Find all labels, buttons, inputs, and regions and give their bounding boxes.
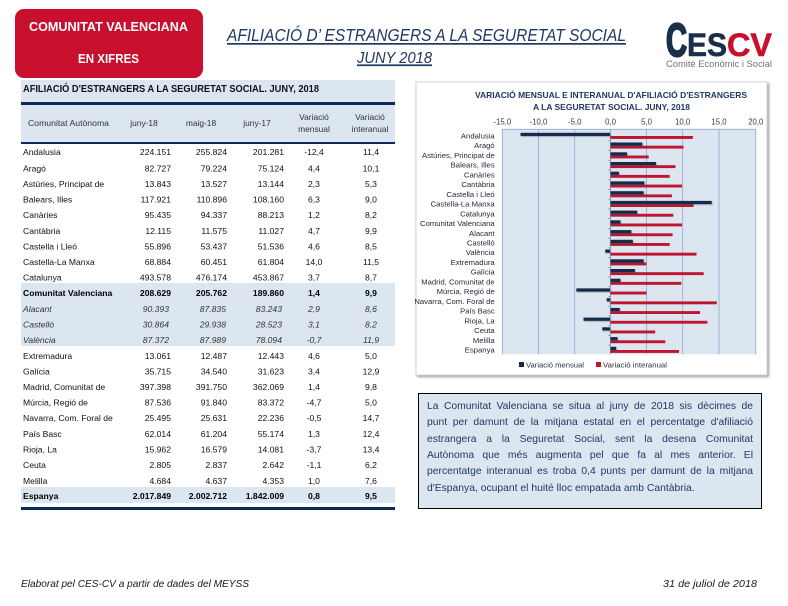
row: Múrcia: 5,0 — [365, 398, 377, 408]
row: Aragó — [23, 164, 380, 174]
table: afiliació per comunitat — [21, 80, 395, 510]
row: Madrid: 397.398 — [140, 382, 171, 392]
row: Aragó: 4,4 — [308, 164, 320, 174]
category labels — [414, 131, 496, 354]
panel: bar chart — [414, 82, 767, 375]
row: Madrid: 9,8 — [365, 382, 377, 392]
row: Catalunya: 453.867 — [253, 272, 284, 282]
row: Navarra: 25.631 — [201, 413, 227, 423]
title: AFILIACIÓ D’ ESTRANGERS A LA SEGURETAT SOCIAL — [226, 24, 626, 45]
row: Castella i Lleó: 8,5 — [365, 242, 377, 252]
table header: Variació — [355, 112, 385, 122]
row: Melilla: 1,0 — [308, 476, 320, 486]
row: Comunitat Valenciana: 208.629 — [140, 288, 171, 298]
row: Espanya: 2.017.849 — [133, 491, 171, 501]
row: València: València — [23, 335, 56, 345]
row: Galícia — [23, 366, 380, 376]
title — [226, 24, 626, 67]
category labels: Navarra, Com. Foral de — [414, 297, 495, 306]
row: Canàries: 1,2 — [308, 210, 320, 220]
row: Madrid: 391.750 — [196, 382, 227, 392]
row: Cantàbria: 4,7 — [308, 226, 320, 236]
row: Madrid — [23, 382, 377, 392]
chart title: VARIACIÓ MENSUAL E INTERANUAL D'AFILIACIÓ D'ESTRANGERS — [475, 89, 748, 100]
row: Astúries — [23, 179, 377, 189]
title: JUNY 2018 — [356, 50, 432, 67]
category labels: Astúries, Principat de — [422, 151, 495, 160]
row: Castella-La Manxa: 68.884 — [145, 257, 171, 267]
row: Comunitat Valenciana: 1,4 — [308, 288, 320, 298]
row: Catalunya: 3,7 — [308, 272, 320, 282]
legend: Variació mensual — [526, 360, 584, 370]
row: Rioja: Rioja, La — [23, 444, 57, 454]
row: Castella i Lleó: 4,6 — [308, 242, 320, 252]
row: Ceuta: 2.805 — [149, 460, 171, 470]
row: Astúries: 13.144 — [258, 179, 284, 189]
row: Canàries: 94.337 — [201, 210, 227, 220]
row: Extremadura — [23, 351, 377, 361]
legend: Variació interanual — [603, 360, 667, 370]
category labels: Castelló — [467, 238, 495, 248]
table header: mensual — [298, 124, 330, 134]
category labels: Alacant — [469, 229, 496, 238]
row: Andalusia: 224.151 — [140, 147, 171, 157]
series: variació mensual — [520, 133, 712, 350]
row: País Basc: 55.174 — [258, 429, 284, 439]
row: Astúries: 13.843 — [145, 179, 171, 189]
row: València: -0,7 — [307, 335, 323, 345]
row: Comunitat Valenciana: 189.860 — [253, 288, 284, 298]
row: Andalusia — [23, 147, 379, 157]
category labels: País Basc — [460, 307, 495, 316]
badge: Comunitat Valenciana en xifres: EN XIFRES — [78, 52, 139, 66]
row: Castella-La Manxa: 11,5 — [363, 257, 379, 267]
row: Rioja: -3,7 — [307, 444, 322, 454]
category labels: Andalusia — [461, 131, 495, 140]
row: Andalusia: 255.824 — [196, 147, 227, 157]
footer: source: Elaborat pel CES-CV a partir de dades del MEYSS — [21, 578, 249, 590]
axis labels: 10,0 — [675, 118, 691, 126]
row: Castelló: 8,2 — [365, 320, 377, 330]
row: Balears: Balears, Illes — [23, 194, 72, 204]
row: Castella-La Manxa: 14,0 — [306, 257, 323, 267]
axis labels — [493, 118, 764, 126]
row: Navarra — [23, 413, 380, 423]
row: Castelló: 30.864 — [143, 320, 169, 330]
chart title — [475, 89, 748, 112]
row: Múrcia: Múrcia, Regió de — [23, 398, 88, 408]
row: Andalusia: 201.281 — [253, 147, 284, 157]
row: Espanya — [23, 491, 377, 501]
row: Cantàbria: 9,9 — [365, 226, 377, 236]
row: Castella-La Manxa — [23, 257, 379, 267]
row: Comunitat Valenciana: 9,9 — [365, 288, 377, 298]
row: Ceuta: 2.642 — [262, 460, 284, 470]
row: Espanya: Espanya — [23, 491, 59, 501]
row: Cantàbria: Cantàbria — [23, 226, 60, 236]
row: Balears: 117.921 — [141, 194, 171, 204]
badge: Comunitat Valenciana en xifres — [15, 9, 203, 78]
table header: juny-17 — [242, 118, 271, 128]
axis labels: 5,0 — [641, 118, 653, 126]
category labels: Comunitat Valenciana — [420, 219, 495, 228]
row: País Basc — [23, 429, 380, 439]
logo: CES-CV: CV — [727, 27, 773, 63]
row: Ceuta — [23, 460, 377, 470]
row: Ceuta: 6,2 — [365, 460, 377, 470]
row: Astúries: 13.527 — [201, 179, 227, 189]
chart title: A LA SEGURETAT SOCIAL. JUNY, 2018 — [533, 103, 690, 112]
row: País Basc: 62.014 — [145, 429, 171, 439]
row: Astúries: Astúries, Principat de — [23, 179, 104, 189]
badge: Comunitat Valenciana en xifres: COMUNITAT VALENCIANA — [29, 20, 188, 34]
category labels: Balears, Illes — [451, 161, 495, 170]
row: Alacant: 83.243 — [256, 304, 282, 314]
table header: Comunitat Autònoma — [28, 118, 109, 128]
category labels: Madrid, Comunitat de — [421, 277, 495, 286]
row: País Basc: 61.204 — [201, 429, 227, 439]
category labels: Ceuta — [474, 326, 495, 335]
row: Castella-La Manxa: 61.804 — [258, 257, 284, 267]
category labels: Galícia — [471, 268, 495, 277]
row: Extremadura: 12.487 — [201, 351, 227, 361]
row: Canàries: 88.213 — [258, 210, 284, 220]
category labels: València — [466, 248, 495, 257]
table title: AFILIACIÓ D'ESTRANGERS A LA SEGURETAT SOCIAL. JUNY, 2018 — [23, 82, 319, 95]
row: Astúries: 2,3 — [308, 179, 320, 189]
row: Andalusia: Andalusia — [23, 147, 61, 157]
row: Alacant: 2,9 — [307, 304, 320, 314]
row: Canàries: 95.435 — [145, 210, 171, 220]
row: Ceuta: 2.837 — [205, 460, 227, 470]
row: Castelló: 29.938 — [199, 320, 226, 330]
row: Extremadura: 5,0 — [365, 351, 377, 361]
row: Alacant — [22, 304, 377, 314]
table header: interanual — [352, 124, 389, 134]
row: Aragó: Aragó — [23, 164, 46, 174]
category labels: Espanya — [465, 346, 495, 354]
category labels: Castella i Lleó — [446, 190, 495, 199]
row: Canàries: 8,2 — [365, 210, 377, 220]
footer: date: 31 de juliol de 2018 — [663, 578, 757, 590]
logo: CES-CV — [666, 14, 773, 69]
row: Madrid: 362.069 — [253, 382, 284, 392]
axis labels: 20,0 — [748, 118, 764, 126]
row: Navarra: Navarra, Com. Foral de — [23, 413, 113, 423]
row: Comunitat Valenciana: 205.762 — [196, 288, 227, 298]
row: Galícia: 34.540 — [201, 366, 227, 376]
row: Múrcia — [23, 398, 377, 408]
category labels: Catalunya — [460, 209, 495, 218]
row: Comunitat Valenciana: Comunitat Valenciana — [23, 288, 113, 298]
row: València: 87.989 — [200, 335, 226, 345]
axis labels: -10,0 — [530, 118, 548, 126]
axis labels: -15,0 — [493, 118, 512, 126]
callout: commentary text: La Comunitat Valenciana se situa al juny de 2018 sis dècimes de — [427, 401, 753, 412]
row: Aragó: 82.727 — [145, 164, 171, 174]
row: Balears: 9,0 — [365, 194, 377, 204]
axis labels: 0,0 — [605, 118, 617, 126]
row: Extremadura: 4,6 — [308, 351, 320, 361]
row: Rioja: 14.081 — [258, 444, 284, 454]
row: Alacant: Alacant — [22, 304, 52, 314]
row: Múrcia: 91.840 — [201, 398, 227, 408]
row: Aragó: 79.224 — [201, 164, 227, 174]
row: Canàries: Canàries — [23, 210, 57, 220]
row: Catalunya: 493.578 — [140, 272, 171, 282]
row: Rioja — [23, 444, 380, 454]
row: Cantàbria: 11.575 — [201, 226, 227, 236]
category labels: Melilla — [473, 336, 495, 345]
category labels: Múrcia, Regió de — [437, 287, 495, 296]
row: Cantàbria: 11.027 — [258, 226, 284, 236]
row: Melilla: 4.353 — [262, 476, 284, 486]
row: Espanya: 9,5 — [365, 491, 377, 501]
row: València — [23, 335, 379, 345]
row: Ceuta: -1,1 — [307, 460, 322, 470]
axis labels: -5,0 — [568, 118, 582, 126]
callout: commentary text: estrangera a la Seguretat Social, sent la desena Comunitat — [427, 434, 753, 445]
row: Castella i Lleó: Castella i Lleó — [23, 242, 77, 252]
row: Astúries: 5,3 — [365, 179, 377, 189]
row: Comunitat Valenciana — [23, 288, 377, 298]
category labels: Rioja, La — [464, 316, 495, 325]
axis labels: 15,0 — [711, 118, 727, 126]
callout: commentary text: d'Espanya, ocupant el huité lloc empatada amb Cantàbria. — [427, 483, 695, 494]
row: Melilla: 7,6 — [365, 476, 377, 486]
row: Castella i Lleó — [23, 242, 377, 252]
row: Navarra: 25.495 — [145, 413, 171, 423]
row: País Basc: 1,3 — [308, 429, 320, 439]
logo: CES-CV: Comité Econòmic i Social — [666, 59, 772, 69]
callout: commentary text: punt per damunt de la mitjana estatal en el percentatge d'afiliació — [427, 417, 753, 428]
logo: CES-CV: ES — [687, 27, 727, 63]
category labels: Aragó — [474, 141, 495, 150]
row: Balears: 110.896 — [197, 194, 227, 204]
row: Alacant: 87.835 — [200, 304, 226, 314]
row: Espanya: 0,8 — [308, 491, 320, 501]
row: Alacant: 8,6 — [365, 304, 377, 314]
row: Balears: 6,3 — [308, 194, 320, 204]
row: Alacant: 90.393 — [143, 304, 169, 314]
row: Espanya: 1.842.009 — [246, 491, 284, 501]
row: Galícia: Galícia — [23, 366, 50, 376]
table header — [28, 112, 389, 134]
row: Galícia: 35.715 — [145, 366, 171, 376]
row: Navarra: 22.236 — [258, 413, 284, 423]
category labels: Canàries — [464, 170, 495, 179]
row: Castella-La Manxa: 60.451 — [201, 257, 227, 267]
row: Balears — [23, 194, 377, 204]
row: Ceuta: Ceuta — [23, 460, 46, 470]
row: Castella i Lleó: 51.536 — [258, 242, 284, 252]
row: Melilla: 4.684 — [149, 476, 171, 486]
row: Melilla — [23, 476, 377, 486]
row: Andalusia: 11,4 — [363, 147, 379, 157]
logo: CES-CV: C — [666, 14, 687, 66]
callout: commentary text: percentatge interanual es troba 0,4 punts per damunt de la mitjana — [427, 466, 753, 477]
row: Rioja: 13,4 — [363, 444, 380, 454]
row: Galícia: 3,4 — [308, 366, 320, 376]
row: Extremadura: 13.061 — [145, 351, 171, 361]
row: Castelló: 28.523 — [255, 320, 282, 330]
row: Catalunya: Catalunya — [23, 272, 62, 282]
row: País Basc: 12,4 — [363, 429, 380, 439]
row: Catalunya — [23, 272, 377, 282]
category labels: Extremadura — [451, 258, 495, 267]
row: Madrid: Madrid, Comunitat de — [23, 382, 105, 392]
row: Múrcia: 87.536 — [145, 398, 171, 408]
row: Aragó: 10,1 — [363, 164, 380, 174]
row: Extremadura: 12.443 — [258, 351, 284, 361]
row: Múrcia: 83.372 — [258, 398, 284, 408]
row: Espanya: 2.002.712 — [189, 491, 227, 501]
row: Melilla: Melilla — [23, 476, 48, 486]
row: Castelló: Castelló — [23, 320, 54, 330]
row: Castelló — [23, 320, 377, 330]
row: Extremadura: Extremadura — [23, 351, 72, 361]
row: València: 78.094 — [256, 335, 282, 345]
row: Madrid: 1,4 — [308, 382, 320, 392]
row: Canàries — [23, 210, 377, 220]
callout: commentary text — [418, 393, 762, 509]
row: Andalusia: -12,4 — [304, 147, 324, 157]
series: variació interanual — [610, 136, 717, 353]
zero axis — [608, 129, 610, 354]
row: Catalunya: 8,7 — [365, 272, 377, 282]
row: Galícia: 12,9 — [363, 366, 380, 376]
row: Rioja: 16.579 — [201, 444, 227, 454]
table header: Variació — [299, 112, 329, 122]
row: Galícia: 31.623 — [258, 366, 284, 376]
table header: juny-18 — [129, 118, 158, 128]
plot area — [502, 129, 756, 354]
legend — [519, 360, 667, 370]
row: Aragó: 75.124 — [258, 164, 284, 174]
row: Castelló: 3,1 — [308, 320, 320, 330]
row: Navarra: -0,5 — [307, 413, 322, 423]
row: Catalunya: 476.174 — [196, 272, 227, 282]
table header: maig-18 — [186, 118, 216, 128]
row: País Basc: País Basc — [23, 429, 62, 439]
row: Castella i Lleó: 55.896 — [145, 242, 171, 252]
row: Múrcia: -4,7 — [307, 398, 322, 408]
row: Cantàbria: 12.115 — [145, 226, 171, 236]
callout: commentary text: Autònoma que més augmenta pel que fa al mes anterior. El — [427, 450, 753, 461]
row: Castella i Lleó: 53.437 — [201, 242, 227, 252]
row: Balears: 108.160 — [253, 194, 284, 204]
row: Navarra: 14,7 — [363, 413, 380, 423]
row: València: 87.372 — [143, 335, 169, 345]
row: Rioja: 15.962 — [145, 444, 171, 454]
row: Cantàbria — [23, 226, 377, 236]
category labels: Castella-La Manxa — [431, 200, 495, 209]
row: Castella-La Manxa: Castella-La Manxa — [23, 257, 95, 267]
row: València: 11,9 — [363, 335, 379, 345]
row: Melilla: 4.637 — [205, 476, 227, 486]
category labels: Cantàbria — [461, 180, 495, 189]
